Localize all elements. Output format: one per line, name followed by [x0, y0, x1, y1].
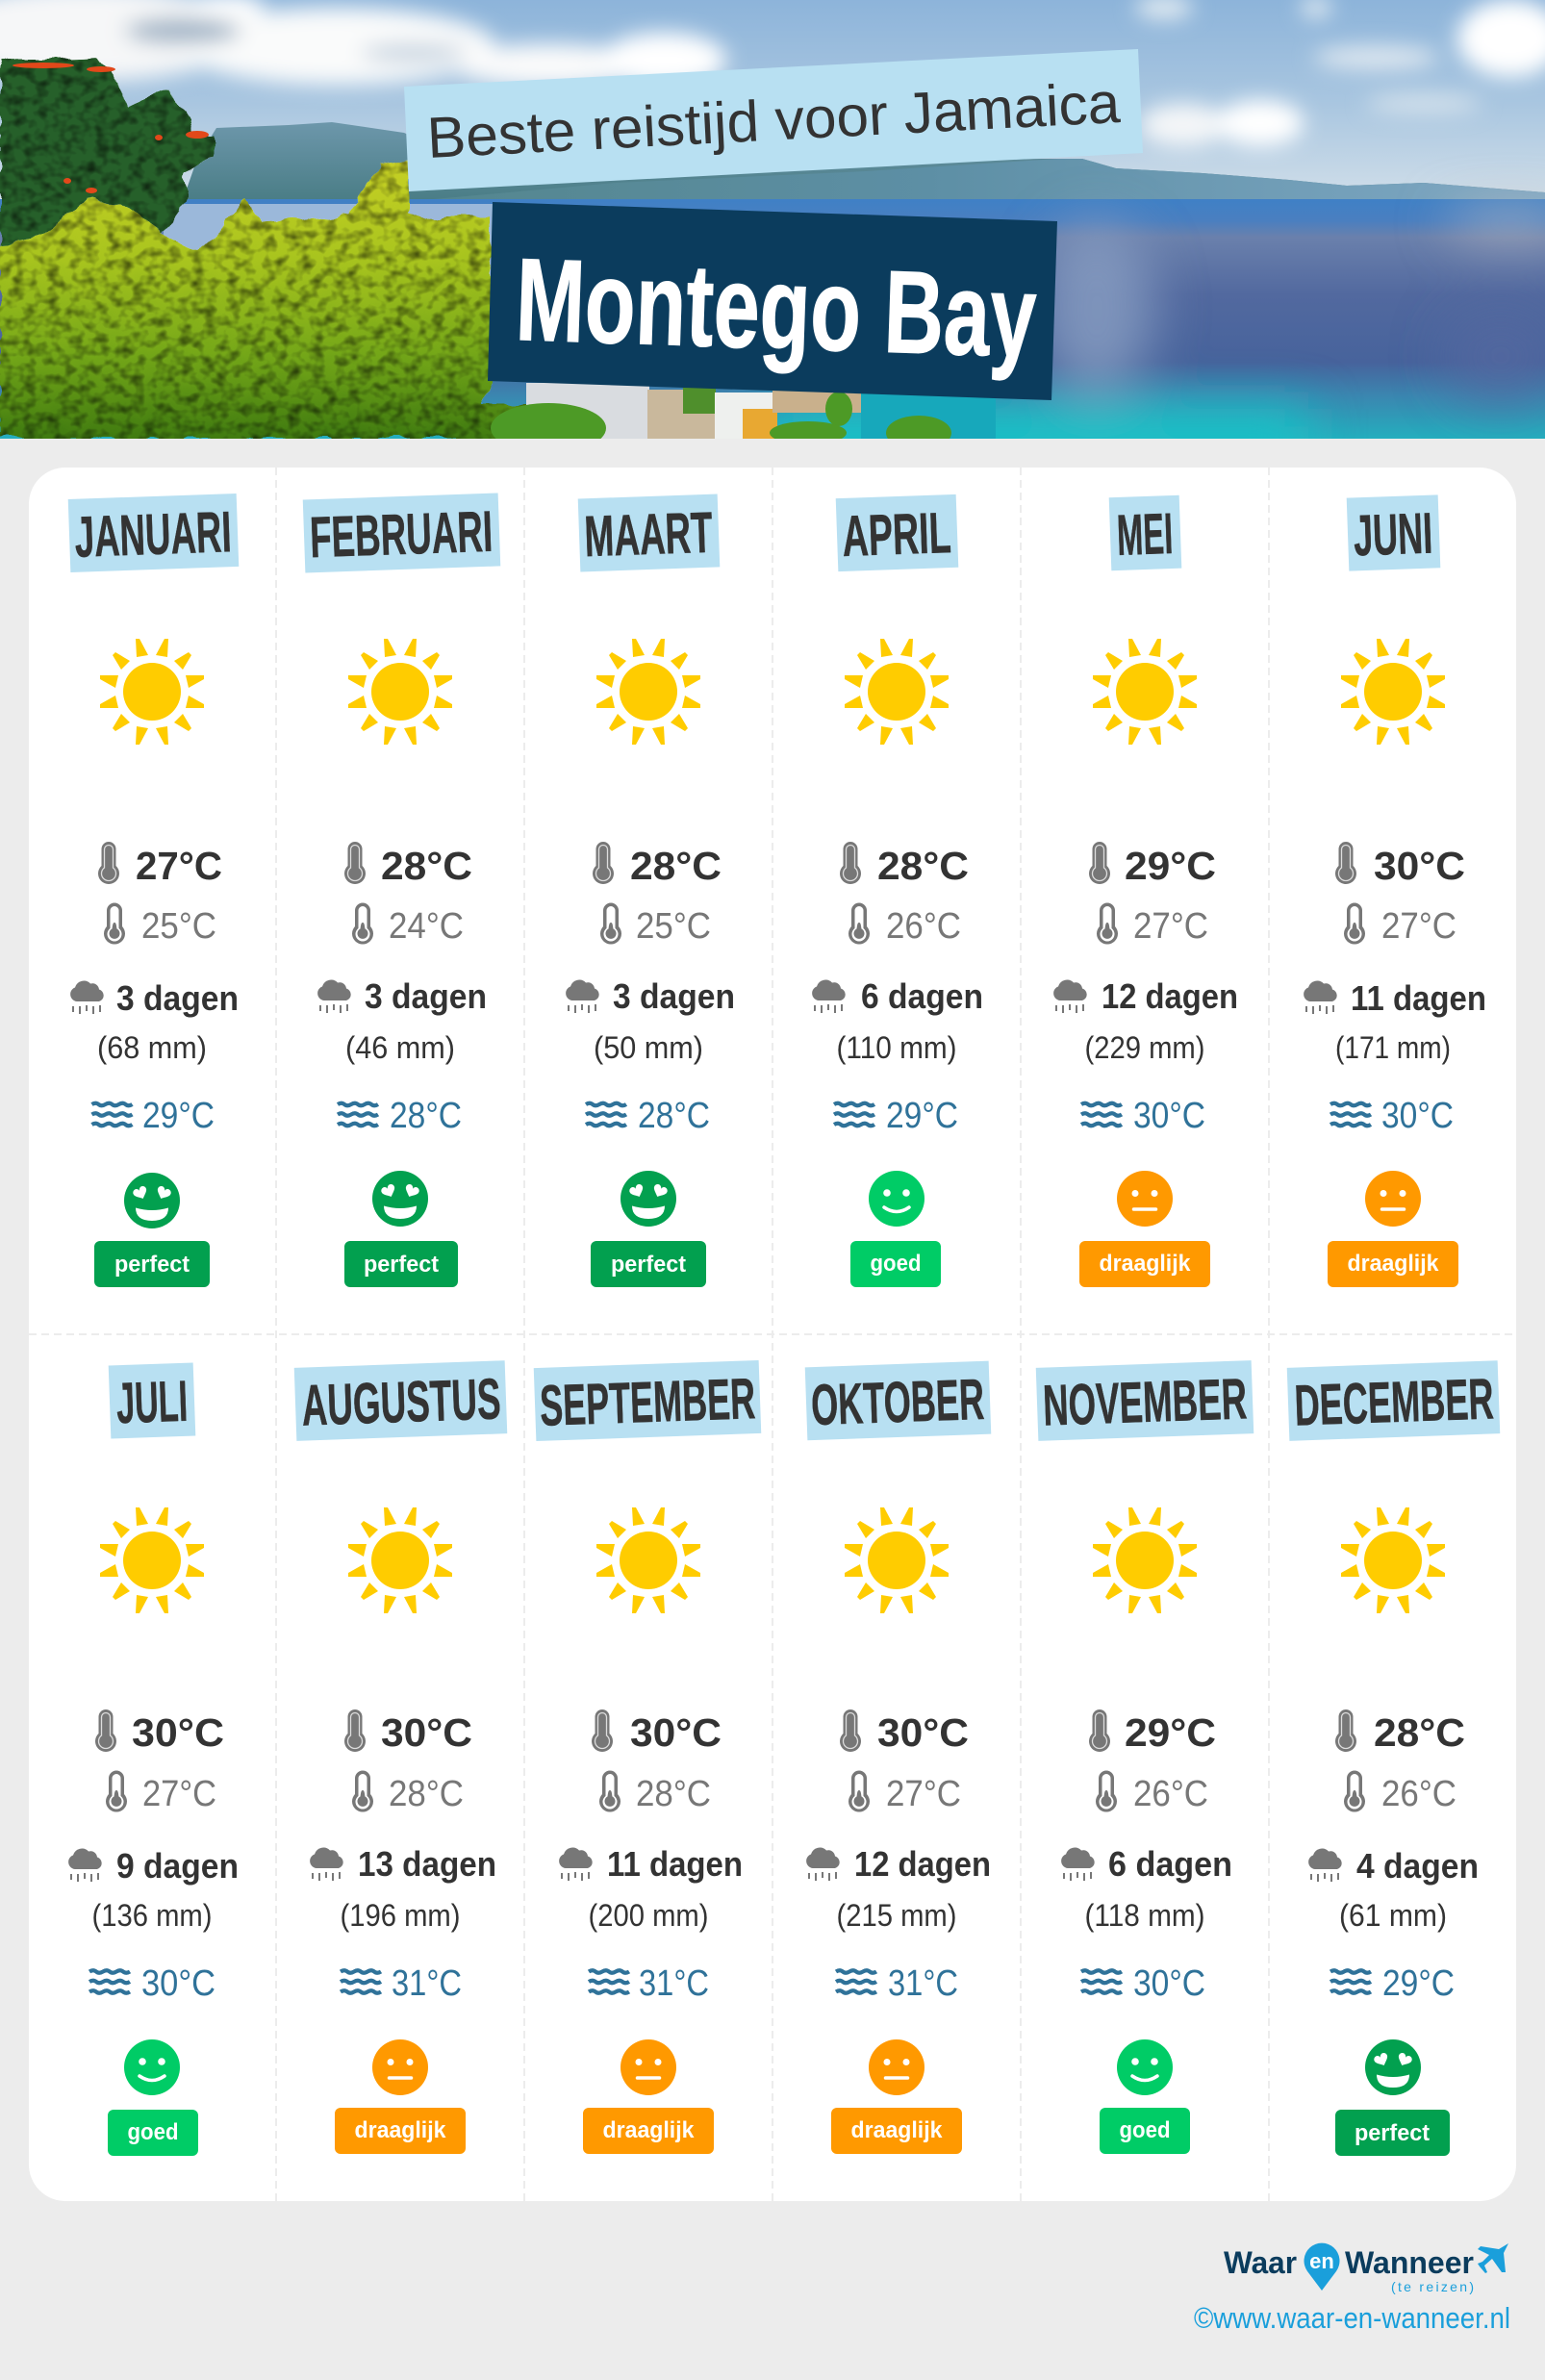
panel: februari [303, 493, 500, 1287]
rating badge: draaglijk [354, 2117, 446, 2143]
min temperature [104, 902, 216, 947]
max temperature [840, 1709, 969, 1755]
panel: oktober [805, 1361, 991, 2154]
min temperature [599, 1770, 711, 1814]
sea temperature: 30°C [1133, 1096, 1205, 1136]
town and shoreline [526, 383, 649, 439]
rainfall: (118 mm) [1085, 1898, 1204, 1933]
min temperature: 27°C [1133, 906, 1208, 947]
max temperature: 28°C [381, 844, 472, 888]
panel: mei [1053, 495, 1238, 1287]
website credit: ©www.waar-en-wanneer.nl [1194, 2301, 1510, 2335]
rating badge [831, 2108, 962, 2154]
month heading [1347, 494, 1440, 571]
month heading [578, 494, 720, 571]
min temperature [352, 1770, 464, 1814]
icon: rating face [372, 1171, 428, 1227]
rating badge [1335, 2110, 1450, 2156]
month heading: FEBRUARI [309, 499, 494, 570]
max temperature: 28°C [630, 844, 722, 888]
icon: rating face [869, 1171, 924, 1227]
sea temperature [341, 1963, 462, 2004]
sea temperature: 31°C [392, 1963, 462, 2004]
sea temperature: 31°C [888, 1963, 958, 2004]
icon: sun [845, 1507, 949, 1613]
icon: rating face [1117, 1171, 1173, 1227]
max temperature [840, 842, 969, 888]
rating badge [583, 2108, 714, 2154]
rain days: 6 dagen [861, 976, 983, 1016]
panel: april [812, 494, 983, 1287]
rainfall: (229 mm) [1085, 1030, 1204, 1065]
rain days: 4 dagen [1356, 1846, 1479, 1886]
month heading: MAART [583, 500, 714, 569]
min temperature [1344, 902, 1456, 947]
logo: Waar en Wanneer: (te reizen) [1391, 2279, 1474, 2294]
month heading [805, 1361, 991, 1440]
rating badge: goed [127, 2119, 179, 2145]
rating badge [1079, 1241, 1210, 1287]
sea temperature [1330, 1096, 1454, 1136]
month heading: AUGUSTUS [300, 1366, 502, 1438]
max temperature [344, 842, 472, 888]
min temperature: 27°C [1381, 906, 1456, 947]
min temperature: 27°C [886, 1774, 961, 1814]
rating badge: draaglijk [1099, 1251, 1191, 1277]
month heading [1109, 495, 1181, 570]
max temperature: 30°C [630, 1710, 722, 1755]
min temperature [848, 902, 961, 947]
panel: november [1036, 1360, 1254, 2154]
min temperature: 25°C [636, 906, 711, 947]
rating badge: draaglijk [850, 2117, 943, 2143]
rating badge: goed [870, 1251, 922, 1277]
min temperature: 26°C [1133, 1774, 1208, 1814]
icon: sun [1341, 639, 1445, 745]
rainfall: (136 mm) [92, 1898, 212, 1933]
icon: rating face [869, 2039, 924, 2095]
icon: sun [845, 639, 949, 745]
rain days: 3 dagen [365, 976, 487, 1016]
panel: september [534, 1360, 761, 2154]
month heading [109, 1362, 195, 1439]
rainfall: (46 mm) [345, 1030, 455, 1065]
rain days [310, 1844, 496, 1884]
title banner [488, 202, 1057, 400]
max temperature [95, 1709, 224, 1755]
sea temperature: 29°C [1382, 1963, 1455, 2004]
rating badge: perfect [1355, 2120, 1430, 2146]
max temperature: 30°C [877, 1710, 969, 1755]
rain days: 11 dagen [607, 1844, 743, 1884]
icon: rating face [1365, 1171, 1421, 1227]
rainfall: (196 mm) [341, 1898, 460, 1933]
month heading [1036, 1360, 1254, 1441]
min temperature [1096, 1770, 1208, 1814]
month heading: JANUARI [73, 499, 233, 570]
icon: rating face [1117, 2039, 1173, 2095]
sea temperature: 31°C [639, 1963, 709, 2004]
rating badge [850, 1241, 941, 1287]
rating badge [335, 2108, 466, 2154]
sea temperature [1330, 1963, 1455, 2004]
rainfall: (215 mm) [837, 1898, 956, 1933]
rain days: 6 dagen [1108, 1844, 1232, 1884]
sea temperature [338, 1096, 462, 1136]
max temperature: 29°C [1125, 844, 1216, 888]
logo: Waar en Wanneer: Wanneer [1345, 2245, 1474, 2280]
icon: sun [100, 1507, 204, 1613]
icon: rating face [372, 2039, 428, 2095]
max temperature: 27°C [136, 844, 222, 888]
month heading: APRIL [841, 500, 952, 569]
rain days [1304, 978, 1486, 1018]
rainfall: (50 mm) [594, 1030, 703, 1065]
max temperature: 30°C [1374, 844, 1465, 888]
sea temperature: 30°C [1133, 1963, 1205, 2004]
month heading: NOVEMBER [1042, 1366, 1248, 1438]
sea temperature [1081, 1096, 1205, 1136]
icon: sun [348, 1507, 452, 1613]
min temperature: 24°C [389, 906, 464, 947]
sea temperature: 30°C [1381, 1096, 1454, 1136]
mountains [183, 122, 1545, 200]
rain days [559, 1844, 743, 1884]
subtitle banner: Beste reistijd voor Jamaica [425, 70, 1122, 170]
min temperature [600, 902, 711, 947]
icon: airplane [1478, 2243, 1508, 2273]
max temperature [98, 842, 222, 888]
max temperature [1335, 842, 1465, 888]
rating badge [1100, 2108, 1190, 2154]
icon: rating face [1365, 2039, 1421, 2095]
month heading: SEPTEMBER [539, 1366, 756, 1438]
rating badge: draaglijk [602, 2117, 695, 2143]
rainfall: (61 mm) [1339, 1898, 1447, 1933]
rating badge: goed [1120, 2117, 1170, 2143]
icon: rating face [124, 1173, 180, 1228]
rating badge [108, 2110, 198, 2156]
rating badge [591, 1241, 706, 1287]
rain days [806, 1844, 991, 1884]
sea temperature [92, 1096, 215, 1136]
icon: map pin: en [1309, 2249, 1334, 2273]
rain days: 13 dagen [358, 1844, 496, 1884]
subtitle banner [404, 49, 1143, 191]
icon: sun [596, 639, 700, 745]
rain days [812, 976, 983, 1016]
rating badge: perfect [114, 1252, 190, 1278]
min temperature [352, 902, 464, 947]
max temperature: 30°C [381, 1710, 472, 1755]
min temperature: 28°C [636, 1774, 711, 1814]
sea temperature [1081, 1963, 1205, 2004]
icon: sun [596, 1507, 700, 1613]
rain days [1308, 1846, 1479, 1886]
sea temperature: 29°C [142, 1096, 215, 1136]
min temperature [106, 1770, 216, 1814]
max temperature: 28°C [877, 844, 969, 888]
sea temperature: 28°C [390, 1096, 462, 1136]
sea temperature [834, 1096, 958, 1136]
panel: climate table card [29, 468, 1516, 2201]
rain days [68, 1846, 239, 1886]
sea temperature [89, 1963, 215, 2004]
min temperature: 25°C [141, 906, 216, 947]
rain days [566, 976, 735, 1016]
rain days: 12 dagen [854, 1844, 991, 1884]
rainfall: (110 mm) [837, 1030, 956, 1065]
panel: maart [566, 494, 735, 1287]
month heading [68, 494, 239, 572]
min temperature: 28°C [389, 1774, 464, 1814]
icon: map pin [1304, 2243, 1340, 2291]
min temperature: 27°C [142, 1774, 216, 1814]
panel: december [1287, 1360, 1500, 2156]
month heading: JULI [115, 1369, 189, 1435]
rating badge: draaglijk [1347, 1251, 1439, 1277]
sea temperature [836, 1963, 958, 2004]
sea temperature [586, 1096, 710, 1136]
header photo: Jamaican coast [0, 0, 1545, 476]
rain days [1061, 1844, 1232, 1884]
month heading [836, 494, 958, 571]
sea temperature [589, 1963, 709, 2004]
rating badge: perfect [364, 1252, 439, 1278]
rain days: 11 dagen [1351, 978, 1486, 1018]
rain days [317, 976, 487, 1016]
month heading [534, 1360, 761, 1441]
max temperature [1089, 1709, 1216, 1755]
rating badge [94, 1241, 210, 1287]
month heading: MEI [1116, 501, 1174, 568]
sea temperature: 30°C [141, 1963, 215, 2004]
max temperature: 29°C [1125, 1710, 1216, 1755]
icon: rating face [124, 2039, 180, 2095]
month heading: OKTOBER [810, 1367, 985, 1437]
panel: januari [68, 494, 239, 1287]
panel: juni [1304, 494, 1486, 1287]
icon: sun [348, 639, 452, 745]
sea [0, 199, 1545, 439]
icon: rating face [621, 2039, 676, 2095]
icon: rating face [621, 1171, 676, 1227]
icon: sun [1093, 639, 1197, 745]
rating badge: perfect [611, 1252, 686, 1278]
rain days: 9 dagen [116, 1846, 239, 1886]
icon: sun [1341, 1507, 1445, 1613]
logo: Waar en Wanneer: Waar [1224, 2245, 1297, 2280]
max temperature: 28°C [1374, 1710, 1465, 1755]
min temperature: 26°C [1381, 1774, 1456, 1814]
rain days: 3 dagen [116, 978, 239, 1018]
icon: sun [100, 639, 204, 745]
panel: augustus [294, 1360, 507, 2154]
max temperature [593, 842, 722, 888]
rain days: 12 dagen [1102, 976, 1238, 1016]
logo: Waar en Wanneer [1224, 2243, 1508, 2294]
max temperature [592, 1709, 722, 1755]
max temperature [1335, 1709, 1465, 1755]
rain days [70, 978, 239, 1018]
min temperature [1097, 902, 1208, 947]
min temperature [848, 1770, 961, 1814]
month heading [294, 1360, 507, 1441]
dark flowering tree [0, 58, 214, 269]
sea temperature: 28°C [638, 1096, 710, 1136]
min temperature: 26°C [886, 906, 961, 947]
sea temperature: 29°C [886, 1096, 958, 1136]
max temperature: 30°C [132, 1710, 224, 1755]
panel: juli [68, 1362, 239, 2156]
month heading [303, 493, 500, 573]
rating badge [344, 1241, 458, 1287]
title banner: Montego Bay [514, 234, 1038, 382]
month heading: JUNI [1353, 501, 1433, 568]
bright green foliage [0, 160, 526, 439]
icon: sun [1093, 1507, 1197, 1613]
rain days [1053, 976, 1238, 1016]
rainfall: (200 mm) [589, 1898, 708, 1933]
max temperature [1089, 842, 1216, 888]
max temperature [344, 1709, 472, 1755]
min temperature [1344, 1770, 1456, 1814]
rain days: 3 dagen [613, 976, 735, 1016]
rating badge [1328, 1241, 1458, 1287]
rainfall: (171 mm) [1335, 1030, 1451, 1065]
rainfall: (68 mm) [97, 1030, 207, 1065]
